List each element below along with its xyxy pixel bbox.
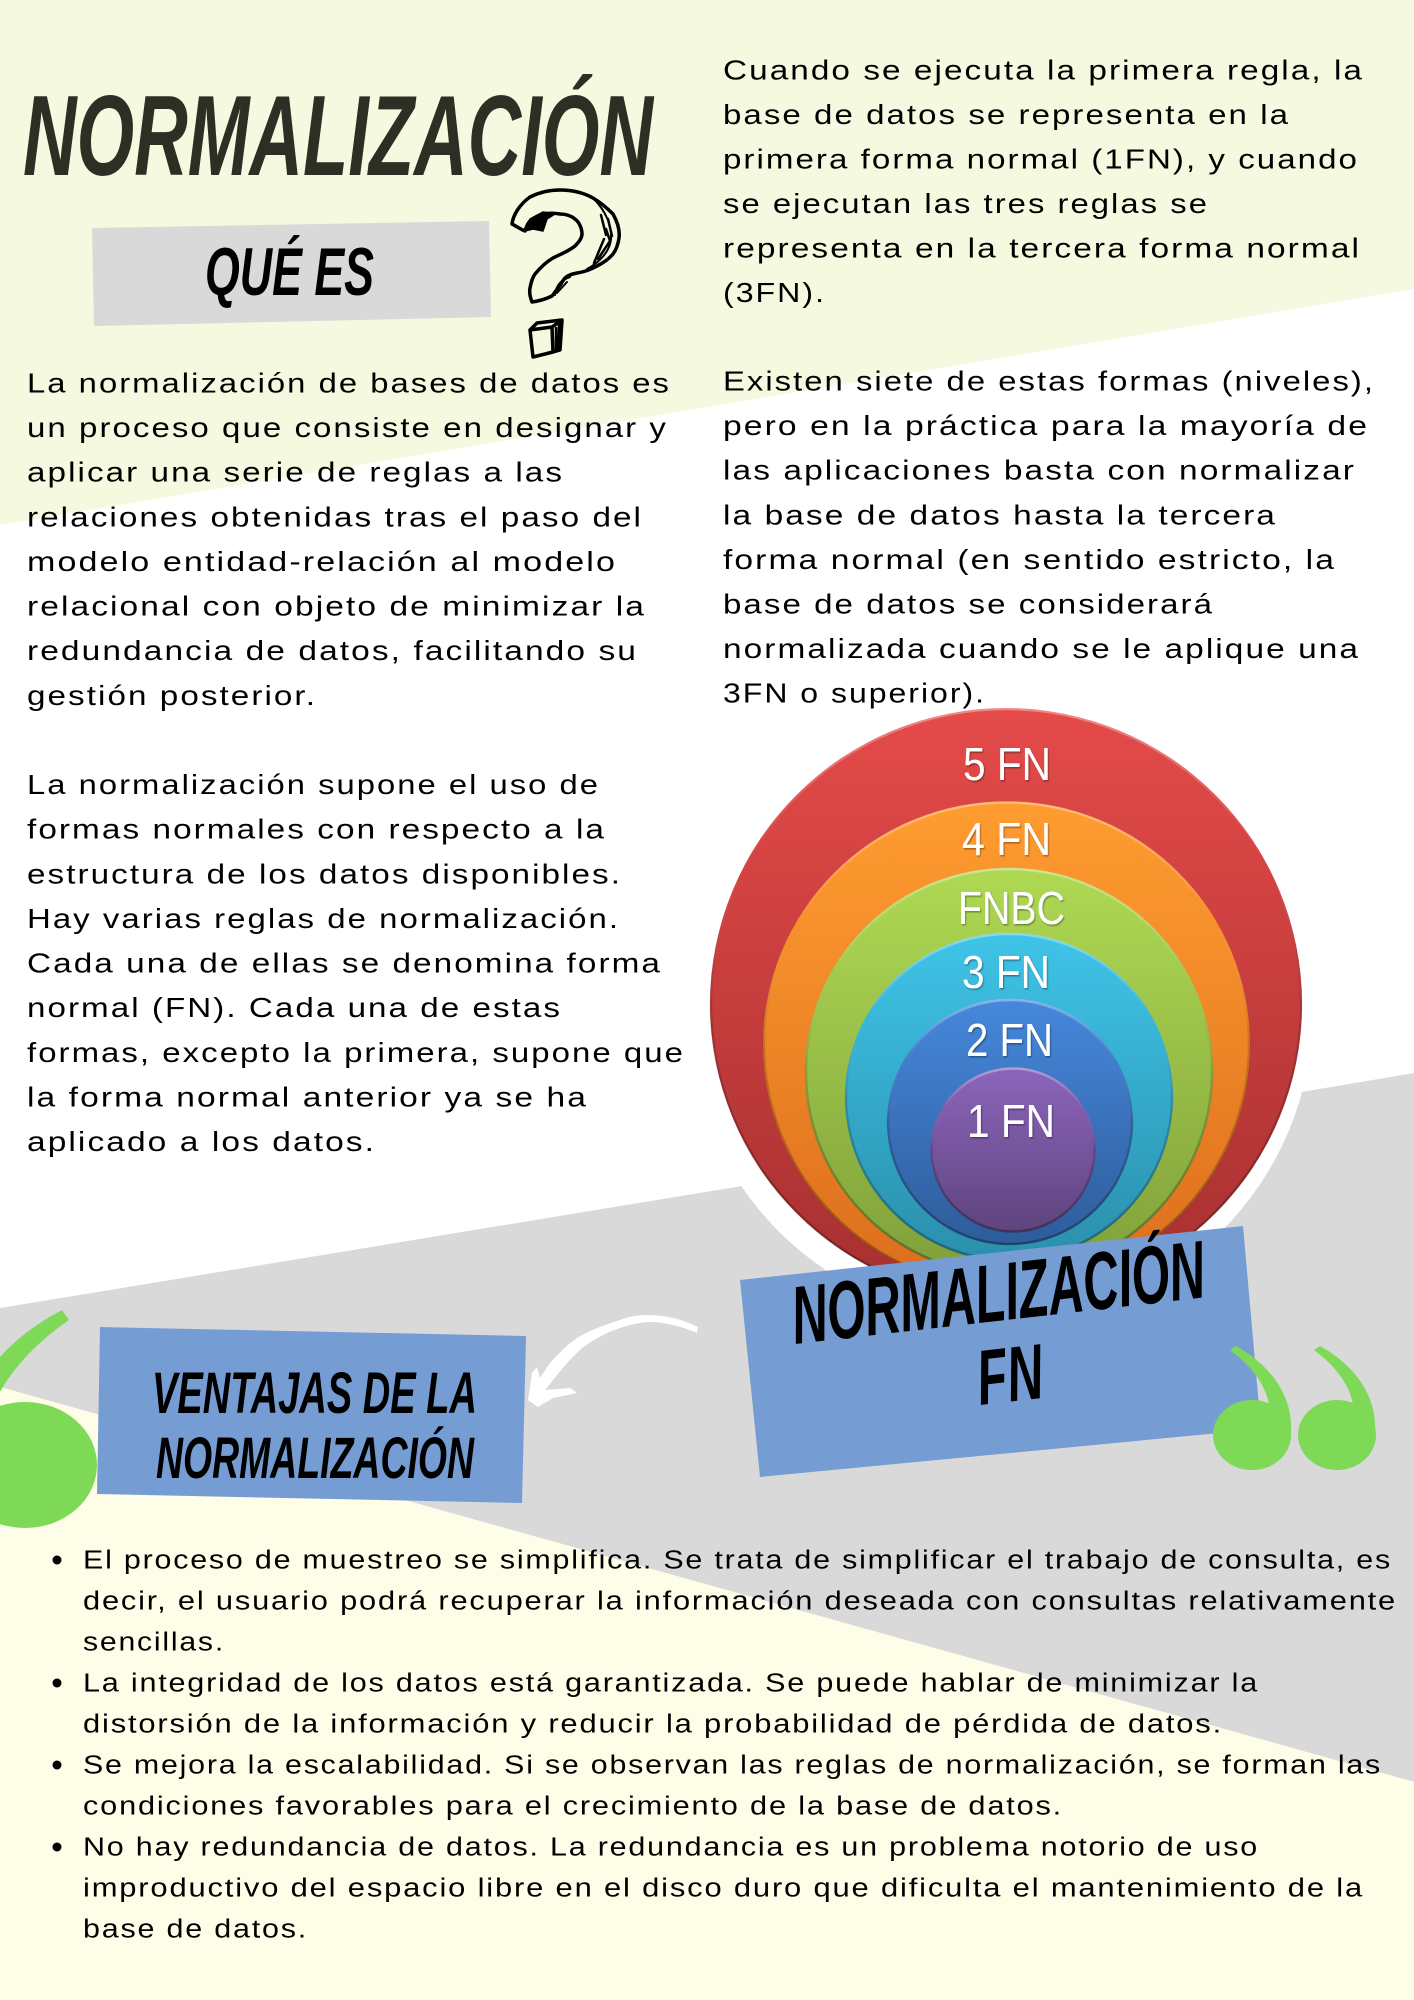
bullet 3: condiciones favorables para el crecimiento de la base de datos. — [83, 1792, 1063, 1820]
text block: first rule, right column: base de datos se representa en la — [723, 99, 1290, 130]
text block: first rule, right column: Cuando se ejecuta la primera regla, la — [723, 54, 1364, 86]
heading: normalización fn: FN — [972, 1327, 1049, 1422]
text block: seven forms, right column — [723, 366, 1375, 709]
text block: definition, left column: la forma normal anterior ya se ha — [27, 1081, 588, 1112]
ring: FNBC: FNBC — [958, 882, 1065, 934]
title: NORMALIZACIÓN — [23, 73, 655, 200]
text block: definition, left column: relacional con objeto de minimizar la — [27, 591, 646, 622]
ring: 2 FN: 2 FN — [966, 1014, 1053, 1066]
bullet 2 — [52, 1670, 1259, 1738]
chart: nested normal forms — [710, 708, 1302, 1300]
background: grey diagonal band — [0, 1073, 1414, 1782]
bullet 2: distorsión de la información y reducir la probabilidad de pérdida de datos. — [83, 1710, 1223, 1738]
ring: 1 FN: 1 FN — [967, 1095, 1055, 1147]
bullet 4 — [52, 1834, 1364, 1944]
heading: normalización fn — [740, 1224, 1261, 1477]
text block: first rule, right column: (3FN). — [723, 277, 826, 308]
ring: 5 FN: 5 FN — [963, 738, 1051, 790]
chart halo — [687, 697, 1313, 1323]
text block: seven forms, right column: pero en la práctica para la mayoría de — [723, 410, 1369, 441]
icon: green opening quote — [0, 1310, 97, 1528]
list: advantages — [52, 1546, 1397, 1944]
text block: seven forms, right column: normalizada cuando se le aplique una — [723, 633, 1360, 664]
bullet 3: Se mejora la escalabilidad. Si se observan las reglas de normalización, se forman las — [83, 1752, 1382, 1780]
icon: green closing quotes — [1213, 1346, 1376, 1470]
text block: definition, left column: estructura de los datos disponibles. — [27, 858, 622, 889]
heading: qué es — [92, 221, 491, 326]
bullet 1: sencillas. — [83, 1628, 225, 1656]
heading: ventajas de la normalización — [97, 1327, 526, 1503]
text block: definition, left column: modelo entidad-relación al modelo — [27, 546, 617, 577]
text block: first rule, right column: se ejecutan las tres reglas se — [723, 188, 1209, 219]
text block: definition, left column: gestión posterior. — [27, 680, 317, 711]
ring: 5 FN — [710, 708, 1302, 1300]
ring: FNBC — [805, 868, 1213, 1276]
ring: 3 FN — [845, 933, 1173, 1261]
arrow: white curved arrow — [528, 1315, 698, 1407]
text block: definition, left column: Hay varias reglas de normalización. — [27, 903, 620, 934]
text block: definition, left column: Cada una de ellas se denomina forma — [27, 948, 662, 978]
bullet 4: No hay redundancia de datos. La redundancia es un problema notorio de uso — [83, 1834, 1259, 1862]
text block: first rule, right column: primera forma normal (1FN), y cuando — [723, 144, 1359, 174]
text block: definition, left column: redundancia de datos, facilitando su — [27, 635, 638, 666]
bullet 1 — [52, 1546, 1397, 1656]
text block: seven forms, right column: la base de datos hasta la tercera — [723, 499, 1277, 530]
text block: definition, left column: La normalización de bases de datos es — [27, 368, 671, 398]
ring: 2 FN — [887, 999, 1133, 1245]
text block: seven forms, right column: forma normal (en sentido estricto, la — [723, 544, 1336, 575]
text block: definition, left column: formas, excepto la primera, supone que — [27, 1037, 685, 1068]
ring: 3 FN: 3 FN — [962, 946, 1050, 998]
heading: ventajas de la normalización: VENTAJAS DE LA — [152, 1361, 477, 1426]
bullet 4: base de datos. — [83, 1916, 308, 1944]
background: bottom cream band — [0, 1387, 1414, 2000]
text block: first rule, right column: representa en la tercera forma normal — [723, 232, 1361, 264]
text block: definition, left column: formas normales con respecto a la — [27, 814, 606, 845]
text block: seven forms, right column: 3FN o superior). — [723, 678, 986, 709]
text block: definition, left column: normal (FN). Cada una de estas — [27, 992, 562, 1023]
ring: 4 FN — [763, 802, 1250, 1288]
ring: 1 FN — [930, 1068, 1096, 1232]
background: top pale green band — [0, 0, 1414, 525]
bullet 1: decir, el usuario podrá recuperar la información deseada con consultas relativamente — [83, 1588, 1397, 1616]
ring: 4 FN: 4 FN — [962, 813, 1051, 865]
text block: seven forms, right column: Existen siete de estas formas (niveles), — [723, 366, 1375, 396]
text block: definition, left column: La normalización supone el uso de — [27, 769, 600, 800]
text block: definition, left column: aplicar una serie de reglas a las — [27, 457, 564, 488]
bullet 3 — [52, 1752, 1382, 1820]
text block: definition, left column: un proceso que consiste en designar y — [27, 412, 668, 443]
icon: question mark — [512, 190, 619, 357]
heading: qué es: QUÉ ES — [205, 234, 374, 310]
text block: seven forms, right column: las aplicaciones basta con normalizar — [723, 455, 1356, 486]
text block: definition, left column: relaciones obtenidas tras el paso del — [27, 501, 643, 532]
bullet 2: La integridad de los datos está garantizada. Se puede hablar de minimizar la — [83, 1670, 1259, 1698]
bullet 4: improductivo del espacio libre en el disco duro que dificulta el mantenimiento de la — [83, 1874, 1364, 1902]
text block: first rule, right column — [723, 54, 1364, 308]
text block: seven forms, right column: base de datos se considerará — [723, 588, 1214, 620]
text block: definition, left column — [27, 368, 685, 1157]
text block: definition, left column: aplicado a los datos. — [27, 1126, 376, 1157]
heading: ventajas de la normalización: NORMALIZACIÓN — [156, 1426, 475, 1491]
bullet 1: El proceso de muestreo se simplifica. Se trata de simplificar el trabajo de consulta, es — [83, 1546, 1392, 1574]
